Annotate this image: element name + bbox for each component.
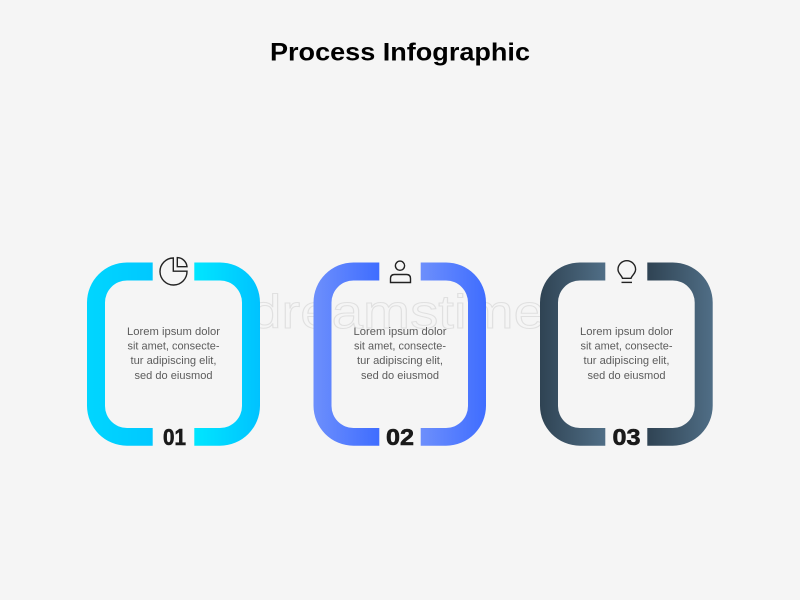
bracket: left blue (314, 262, 379, 446)
number 01: 01 (163, 424, 186, 450)
bracket: right dark (647, 262, 713, 446)
description text: tur adipiscing elit, (584, 355, 670, 367)
description text: sed do eiusmod (134, 370, 212, 382)
description text: sit amet, consecte- (580, 340, 673, 352)
description text: tur adipiscing elit, (130, 355, 216, 367)
bracket: right cyan (194, 262, 260, 446)
number 03: 03 (612, 424, 640, 450)
title: Process Infographic (270, 38, 530, 66)
icon: light bulb (618, 261, 636, 282)
description text: Lorem ipsum dolor (580, 326, 673, 338)
description text: Lorem ipsum dolor (354, 326, 447, 338)
bracket: left dark (540, 262, 605, 446)
description text: sit amet, consecte- (128, 340, 220, 352)
bracket: left cyan (87, 262, 153, 446)
description text: sed do eiusmod (588, 370, 666, 382)
description text: tur adipiscing elit, (357, 355, 443, 367)
description text: sit amet, consecte- (354, 340, 446, 352)
number 02: 02 (386, 424, 414, 450)
description text: Lorem ipsum dolor (127, 326, 220, 338)
icon: pie chart (160, 258, 187, 285)
watermark: dreamstime (250, 285, 545, 338)
icon: person (390, 261, 410, 282)
description text: sed do eiusmod (361, 370, 439, 382)
panel: step 1 (87, 258, 260, 450)
panel: step 3 (540, 261, 713, 450)
panel: step 2 (314, 261, 486, 450)
bracket: right blue (421, 262, 486, 446)
